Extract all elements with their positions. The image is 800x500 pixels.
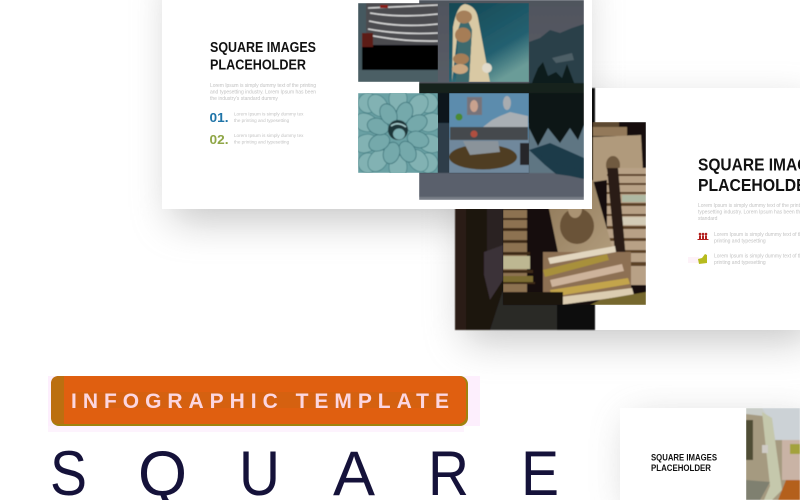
badge label: INFOGRAPHIC TEMPLATE [71, 390, 449, 413]
panel: slide with square images [162, 0, 592, 209]
list item two text: printing and typesetting [714, 260, 766, 266]
photo: living room [449, 93, 529, 173]
body text: Lorem Ipsum is simply dummy text of the printing [210, 83, 316, 89]
body text: the industry's standard dummy [210, 96, 278, 102]
slide shadows [172, 0, 800, 500]
icon: red people [698, 233, 708, 240]
photo: succulent [358, 93, 438, 173]
body text: standard [698, 216, 718, 222]
list item 02 [210, 132, 304, 147]
body text: and typesetting industry. Lorem Ipsum has been [210, 90, 316, 96]
heading: square images placeholder: SQUARE IMAGES [210, 40, 316, 56]
badge: infographic template [48, 376, 480, 432]
list item 01 [210, 110, 304, 125]
list item 02: 02. [210, 132, 228, 147]
list item 01: 01. [210, 110, 228, 125]
photo: dark brick alley [455, 88, 595, 330]
heading: square images placeholder [651, 452, 717, 473]
heading: square images placeholder: SQUARE IMAGES [651, 452, 717, 462]
body text [210, 83, 316, 102]
list item 01: Lorem Ipsum is simply dummy tex [234, 112, 304, 116]
heading: square images placeholder [698, 154, 800, 195]
photo: boats [358, 3, 438, 82]
panel: bottom slide [620, 408, 800, 500]
panel: slide with books photo [455, 88, 800, 330]
photo: hallway [746, 408, 800, 500]
heading: square images placeholder: PLACEHOLDER [210, 58, 306, 74]
heading: square images placeholder: PLACEHOLDER [651, 463, 711, 473]
photo: old books and portraits [503, 122, 646, 305]
list item one text: printing and typesetting [714, 238, 766, 244]
heading: square images placeholder [210, 40, 316, 74]
photo: ferris wheel [449, 3, 529, 82]
photo: mountain lake [419, 0, 584, 200]
list item 02: Lorem Ipsum is simply dummy tex [234, 133, 304, 138]
body text [698, 203, 800, 222]
list item 01: the printing and typesetting [234, 118, 290, 123]
title: square [50, 439, 559, 500]
list item two text [714, 254, 800, 266]
list item one text [714, 232, 800, 244]
icon: green thumb [688, 254, 707, 264]
list item 02: the printing and typesetting [234, 140, 290, 144]
